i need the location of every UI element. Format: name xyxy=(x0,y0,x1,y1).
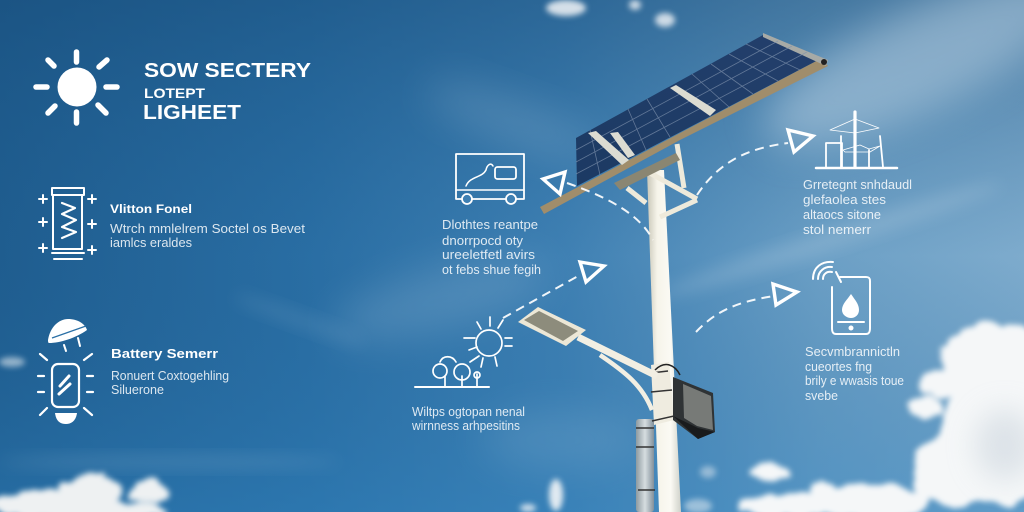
title xyxy=(143,60,312,124)
text block: upper left callout: Dlothtes reantpe xyxy=(442,218,538,232)
text block: battery sensor: Ronuert Coxtogehling xyxy=(111,369,229,383)
text block: battery sensor xyxy=(111,346,229,397)
text block: vision panel: iamlcs eraldes xyxy=(110,236,192,250)
icon: bulb with dome xyxy=(38,319,93,424)
text block: lower right callout: svebe xyxy=(805,389,838,403)
cloud: bottom left xyxy=(0,475,170,512)
street light pole xyxy=(614,144,697,512)
lamp arm xyxy=(578,337,657,410)
text block: battery sensor: Siluerone xyxy=(111,383,164,397)
text block: upper left callout: ureeletfetl avirs xyxy=(442,248,535,262)
text block: vision panel xyxy=(110,202,306,250)
text block: upper left callout xyxy=(442,218,541,277)
icon: panel cylinder xyxy=(39,188,96,259)
arrow: to phone xyxy=(696,284,797,332)
text block: lower right callout: brily e wwasis toue xyxy=(805,374,904,388)
text block: lower left callout: Wiltps ogtopan nenal xyxy=(412,405,525,419)
arrow: from sun icon xyxy=(503,262,604,318)
text block: upper left callout: dnorrpocd oty xyxy=(442,234,524,248)
title: LOTEPT xyxy=(144,85,205,101)
panel brackets xyxy=(588,85,716,165)
text block: upper right callout xyxy=(803,178,912,237)
text block: vision panel: Wtrch mmlelrem Soctel os Bevet xyxy=(110,222,306,236)
icon: sun and trees xyxy=(415,317,512,387)
text block: upper left callout: ot febs shue fegih xyxy=(442,263,541,277)
text block: upper right callout: stol nemerr xyxy=(803,223,871,237)
battery box xyxy=(655,365,715,439)
arrow: to camper van xyxy=(543,172,653,240)
text block: upper right callout: glefaolea stes xyxy=(803,193,886,207)
cloud: small wisps xyxy=(0,0,716,512)
icon: structure xyxy=(816,112,897,168)
conduit xyxy=(636,419,655,512)
title: LIGHEET xyxy=(143,102,241,124)
pole collar xyxy=(651,362,674,425)
bracket clamp xyxy=(614,153,680,190)
cloud shading xyxy=(975,409,1024,481)
text block: lower left callout xyxy=(411,405,525,433)
solar panel xyxy=(540,33,828,214)
text block: battery sensor: Battery Semerr xyxy=(111,346,218,361)
text block: upper right callout: Grretegnt snhdaudl xyxy=(803,178,912,192)
text block: lower left callout: wirnness arhpesitins xyxy=(411,419,520,433)
text block: lower right callout: cueortes fng xyxy=(805,360,872,374)
text block: vision panel: Vlitton Fonel xyxy=(110,202,192,216)
cloud: bottom right xyxy=(739,322,1024,512)
street lamp xyxy=(518,307,657,410)
logo: sun icon xyxy=(36,52,117,123)
pole shaft xyxy=(647,170,681,512)
icon: camper van xyxy=(456,154,524,204)
top bracket xyxy=(627,144,697,217)
lamp head xyxy=(518,307,586,346)
icon: phone with drop and wifi xyxy=(813,262,870,334)
text block: lower right callout: Secvmbrannictln xyxy=(805,345,900,359)
title: SOW SECTERY xyxy=(144,60,312,82)
text block: upper right callout: altaocs sitone xyxy=(803,208,881,222)
arrow: to structure icon xyxy=(697,130,813,195)
text block: lower right callout xyxy=(805,345,904,403)
